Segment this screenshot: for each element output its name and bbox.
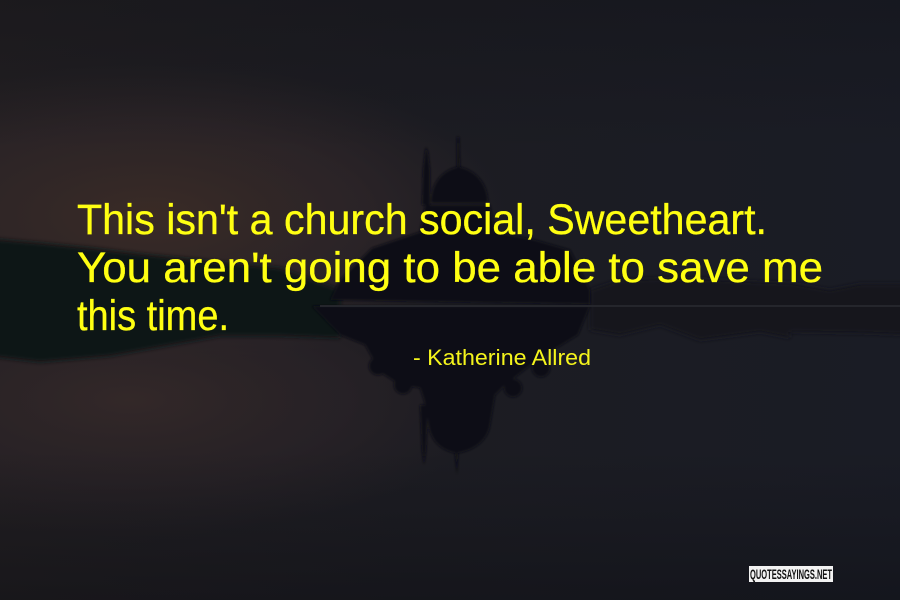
waterline xyxy=(320,305,900,307)
mosque reflection xyxy=(312,306,590,475)
icon: minaret xyxy=(422,147,430,205)
quote line 1: This isn't a church social, Sweetheart. xyxy=(77,196,767,244)
quote text xyxy=(77,196,823,340)
icon: mosque body xyxy=(330,205,590,304)
icon: main dome xyxy=(431,137,488,203)
watermark badge: QUOTESSAYINGS.NET xyxy=(750,566,832,582)
mosque silhouette xyxy=(330,137,590,304)
author attribution: - Katherine Allred xyxy=(413,345,591,370)
quote line 3: this time. xyxy=(77,292,229,340)
distant shoreline silhouette xyxy=(0,238,900,362)
watermark badge xyxy=(749,566,833,582)
quote line 2: You aren't going to be able to save me xyxy=(77,244,823,292)
